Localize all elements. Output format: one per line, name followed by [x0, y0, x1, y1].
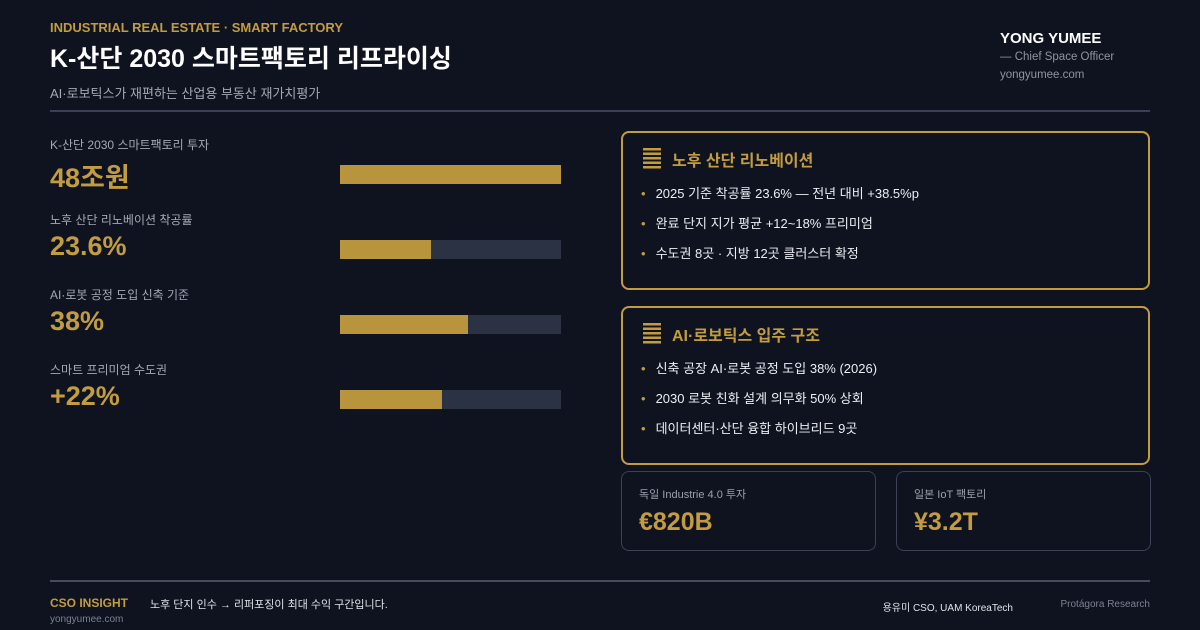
card: germany: 독일 Industrie 4.0 투자	[639, 489, 746, 501]
card: japan: 일본 IoT 팩토리	[914, 489, 986, 501]
metric 1: K-산단 2030 스마트팩토리 투자	[50, 138, 209, 152]
author block: YONG YUMEE	[1000, 30, 1101, 47]
panel: AI robotics: 데이터센터·산단 융합 하이브리드 9곳	[656, 421, 857, 436]
metric 4: +22%	[50, 381, 120, 411]
footer: 용유미 CSO, UAM KoreaTech	[883, 603, 1013, 614]
metric 4	[50, 363, 561, 411]
metric 3	[50, 288, 561, 336]
card: germany: €820B	[639, 508, 713, 536]
metric 4: 스마트 프리미엄 수도권	[50, 363, 167, 377]
card: japan	[896, 471, 1151, 551]
author block: yongyumee.com	[1000, 69, 1084, 81]
author block	[1000, 30, 1114, 81]
footer: CSO INSIGHT	[50, 596, 128, 610]
footer: 노후 단지 인수 → 리퍼포징이 최대 수익 구간입니다.	[150, 599, 388, 611]
subtitle: AI·로보틱스가 재편하는 산업용 부동산 재가치평가	[50, 86, 320, 101]
panel: renovation	[621, 131, 1150, 290]
author block: — Chief Space Officer	[1000, 51, 1114, 63]
metric 2: 노후 산단 리노베이션 착공률	[50, 213, 192, 227]
metric 3: 38%	[50, 306, 104, 336]
panel: renovation: 완료 단지 지가 평균 +12~18% 프리미엄	[656, 216, 873, 231]
metric 1	[50, 138, 561, 193]
footer: yongyumee.com	[50, 614, 123, 625]
footer	[50, 596, 1150, 625]
panel: renovation: 노후 산단 리노베이션	[672, 153, 813, 170]
footer: Protágora Research	[1060, 599, 1150, 610]
title: K-산단 2030 스마트팩토리 리프라이싱	[50, 45, 452, 73]
metric 2: 23.6%	[50, 231, 127, 261]
panel: AI robotics: 2030 로봇 친화 설계 의무화 50% 상회	[656, 391, 864, 406]
card: japan: ¥3.2T	[914, 508, 978, 536]
panel: AI robotics: AI·로보틱스 입주 구조	[672, 328, 820, 345]
kicker: INDUSTRIAL REAL ESTATE · SMART FACTORY	[50, 20, 343, 35]
metric 3: AI·로봇 공정 도입 신축 기준	[50, 288, 189, 302]
panel: renovation: 2025 기준 착공률 23.6% — 전년 대비 +38.5%p	[656, 186, 919, 201]
metric 2	[50, 213, 561, 261]
metric 1: 48조원	[50, 163, 130, 193]
card: germany	[621, 471, 876, 551]
panel: renovation: 수도권 8곳 · 지방 12곳 클러스터 확정	[656, 246, 859, 261]
panel: AI robotics	[621, 306, 1150, 465]
panel: AI robotics: 신축 공장 AI·로봇 공정 도입 38% (2026)	[656, 361, 877, 376]
